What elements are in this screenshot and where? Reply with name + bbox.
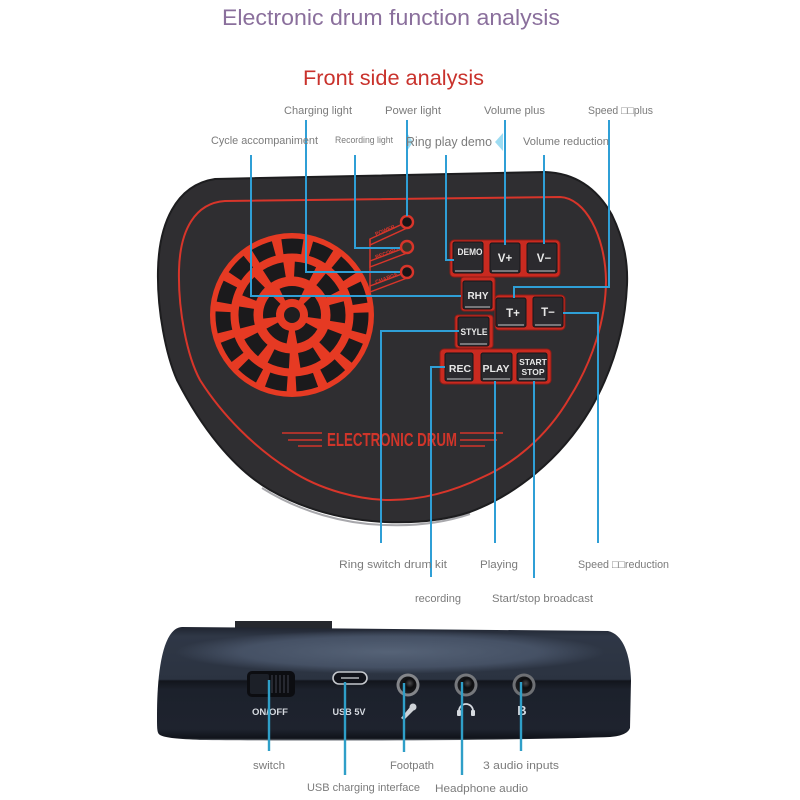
button: V+: V+ <box>498 253 512 265</box>
icon: headphones <box>457 704 475 716</box>
button: START STOP: STOP <box>522 367 545 377</box>
label: power light: Power light <box>385 105 441 117</box>
button: STYLE <box>458 317 489 346</box>
indicator lights: POWER <box>375 224 396 238</box>
button: T- <box>533 297 563 327</box>
button: DEMO: DEMO <box>458 247 482 258</box>
label: volume reduction: Volume reduction <box>523 136 609 148</box>
button: RHY <box>463 281 492 309</box>
label: start/stop broadcast: Start/stop broadcast <box>492 593 593 605</box>
button: START STOP <box>517 353 548 381</box>
on/off switch <box>247 671 295 697</box>
button: V-: V− <box>537 253 551 265</box>
button: STYLE: STYLE <box>460 327 488 338</box>
drum body: front view <box>158 172 627 525</box>
switch caption: ON/OFF <box>252 707 288 718</box>
label: cycle accompaniment: Cycle accompaniment <box>211 135 318 147</box>
label: usb charging: USB charging interface <box>307 782 420 794</box>
label: audio inputs: 3 audio inputs <box>483 760 560 772</box>
button: T+: T+ <box>506 308 520 320</box>
button: REC: REC <box>449 363 472 375</box>
leader: cycle accompaniment <box>251 155 461 296</box>
button: RHY: RHY <box>467 291 489 302</box>
speaker grille <box>210 233 374 397</box>
icon: mic <box>401 704 416 720</box>
button: T-: T− <box>541 307 555 319</box>
leader: speed plus <box>514 120 609 298</box>
button: T+ <box>496 298 526 327</box>
indicator lights: CHARGE <box>375 272 399 286</box>
drum body: side view <box>157 621 631 741</box>
label: headphone audio: Headphone audio <box>435 783 528 795</box>
label: ring play demo: Ring play demo <box>406 134 492 149</box>
label: footpath: Footpath <box>390 760 434 772</box>
label: charging light: Charging light <box>284 105 352 117</box>
leader: audio inputs <box>520 682 522 751</box>
label: volume plus: Volume plus <box>484 105 545 117</box>
leader: headphone <box>461 682 463 775</box>
icon: audio input: B <box>517 703 527 718</box>
label: recording: recording <box>415 593 461 605</box>
label: ring switch drum kit: Ring switch drum kit <box>339 559 447 571</box>
leader: volume reduction <box>543 155 545 244</box>
leader: usb <box>344 682 346 775</box>
top tab <box>235 621 332 629</box>
button: REC <box>445 353 473 381</box>
button: DEMO <box>453 242 483 273</box>
red button surrounds <box>440 240 565 384</box>
leader: start/stop <box>533 381 535 578</box>
drum pad shell <box>158 172 627 522</box>
label: playing: Playing <box>480 559 518 571</box>
button panel <box>440 240 565 384</box>
button: PLAY <box>481 353 512 381</box>
leader: volume plus <box>504 120 506 245</box>
leader: footpath <box>403 683 405 752</box>
jack: footpath <box>396 674 420 696</box>
leader: power light <box>406 120 408 216</box>
jack: headphone <box>454 674 478 696</box>
side shell <box>157 627 631 741</box>
label: speed plus: Speed □□plus <box>588 105 653 117</box>
leader lines: front view <box>251 120 609 578</box>
heading: front side analysis: Front side analysis <box>303 67 484 90</box>
leader: switch <box>268 680 270 751</box>
leader: speed reduction <box>563 313 598 543</box>
button: V- <box>527 243 557 273</box>
labels: side view <box>253 760 560 795</box>
label: switch: switch <box>253 760 285 772</box>
leader: ring switch drum kit <box>381 331 459 543</box>
leader: charging light <box>306 120 400 272</box>
logo: ELECTRONIC DRUM: ELECTRONIC DRUM <box>327 430 457 450</box>
usb port <box>333 672 367 684</box>
button: PLAY: PLAY <box>482 363 510 375</box>
light-blue markers near ring play demo <box>407 133 503 151</box>
button: START STOP: START <box>519 357 548 367</box>
label: speed reduction: Speed □□reduction <box>578 559 669 571</box>
title: Electronic drum function analysis <box>222 5 560 30</box>
leader: ring play demo <box>446 155 454 260</box>
indicator lights: RECORD <box>375 247 399 261</box>
labels: front view <box>211 105 669 605</box>
leader lines: side view <box>269 680 521 775</box>
red trim line <box>179 197 606 500</box>
label: recording light: Recording light <box>335 135 393 145</box>
usb caption: USB 5V <box>332 707 366 718</box>
indicator lights <box>370 216 413 292</box>
leader: playing <box>494 381 496 543</box>
leader: recording light <box>355 155 400 248</box>
jack: audio input <box>512 674 536 696</box>
bottom edge highlight <box>262 488 470 525</box>
highlight on upper shell <box>175 630 605 674</box>
button: V+ <box>490 243 520 273</box>
leader: recording <box>431 367 445 577</box>
